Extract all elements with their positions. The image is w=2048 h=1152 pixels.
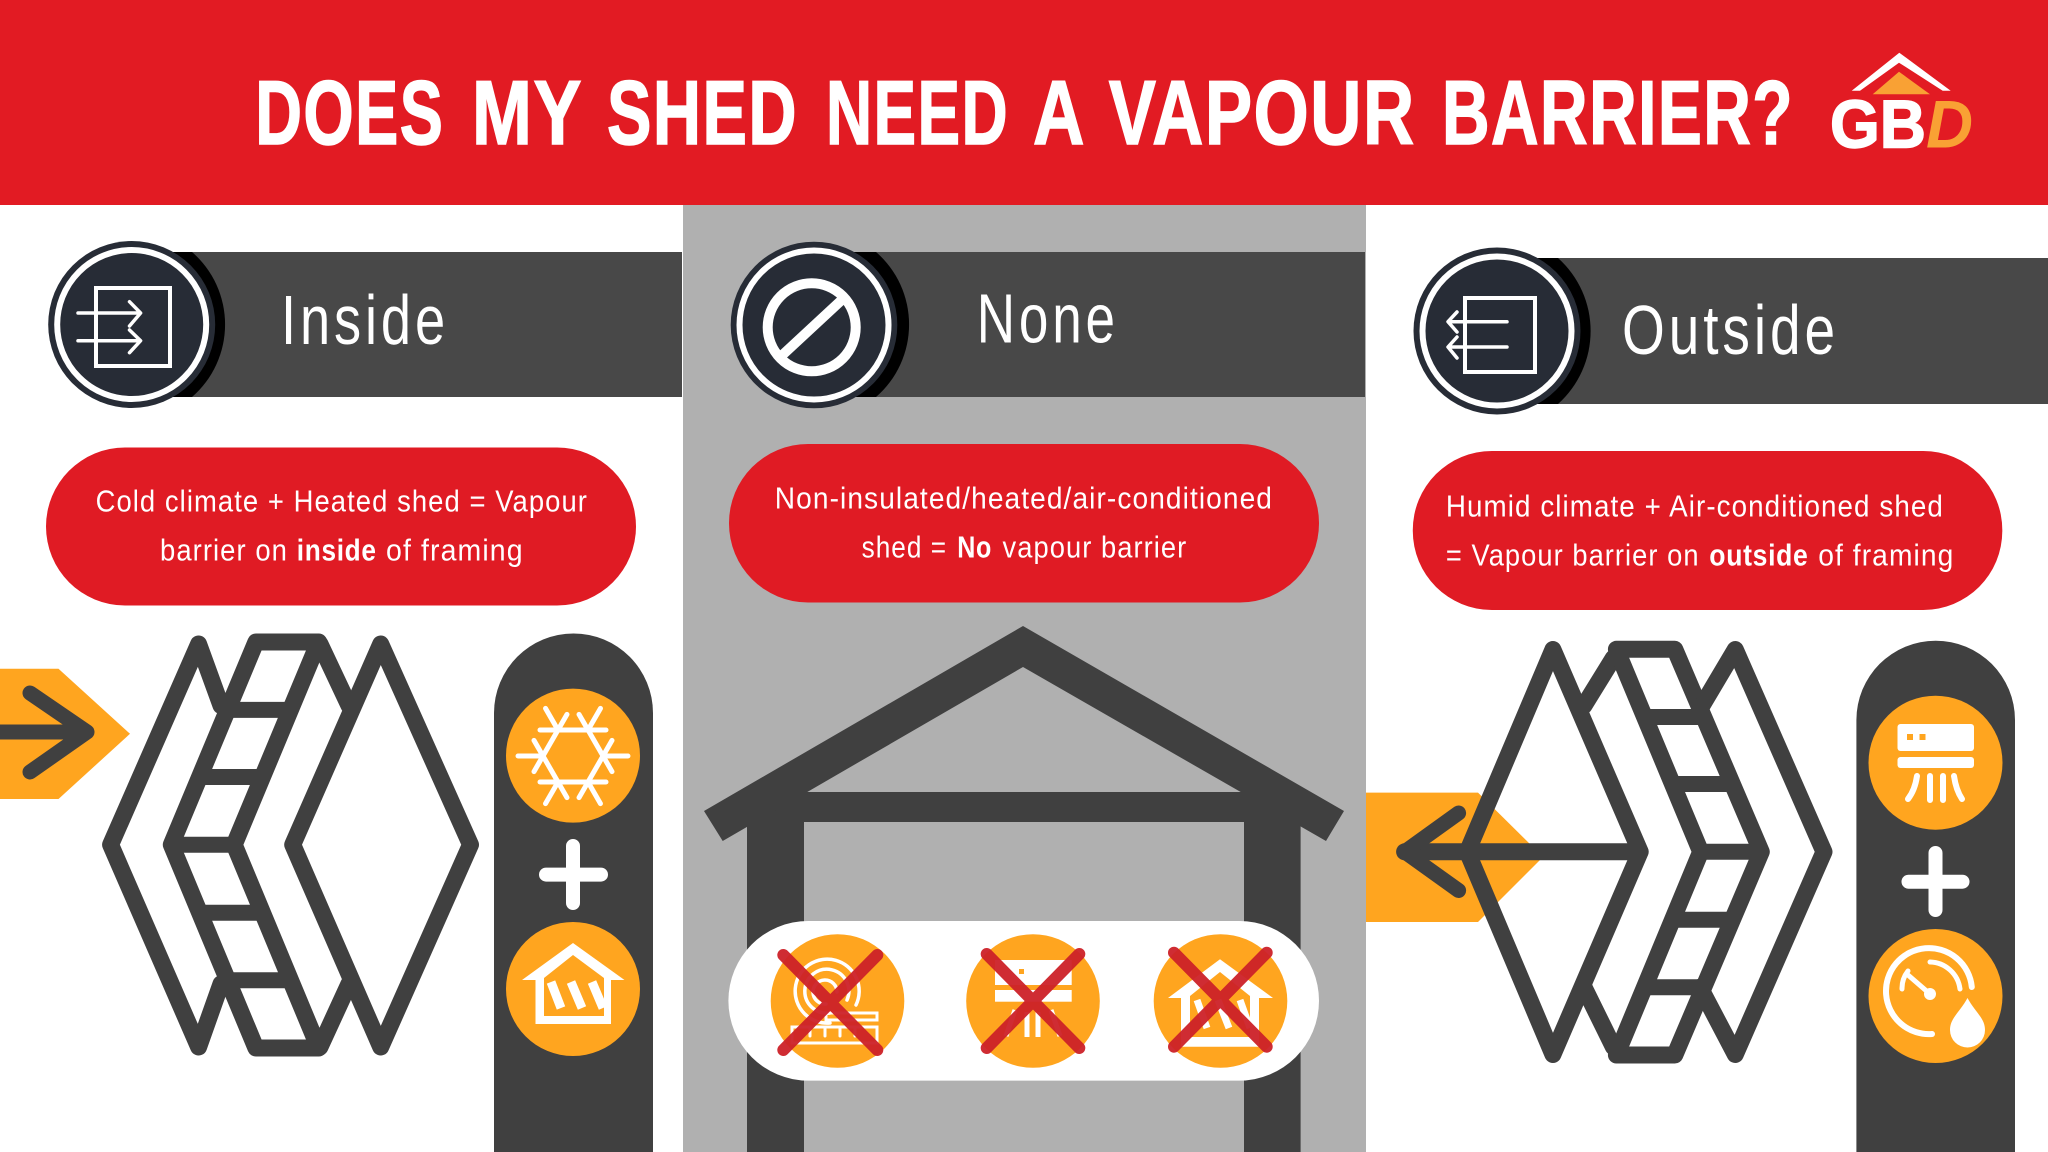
- icon: arrows into box: [48, 241, 215, 408]
- title: VAPOUR: [1109, 63, 1416, 164]
- callout: cold climate: Cold climate + Heated shed = Vapour: [96, 484, 588, 519]
- panel: none: [704, 242, 1365, 1152]
- callout: humid climate: = Vapour barrier on: [1446, 538, 1700, 573]
- icon: humidity gauge: [1868, 929, 2002, 1063]
- title: MY: [472, 63, 583, 164]
- icon: snowflake: [506, 689, 640, 823]
- header banner: [0, 0, 2048, 205]
- wall layers diagram with arrow: [1405, 649, 1824, 1055]
- strip: no insulation, heat or air conditioning: [728, 921, 1319, 1081]
- callout: non-insulated: shed =: [862, 529, 947, 564]
- icon: plus: [546, 846, 601, 903]
- heading bar: none: [815, 252, 1365, 397]
- logo: GBD: [1830, 53, 1973, 162]
- icon: crossed-out air conditioner: [966, 934, 1100, 1068]
- icon: plus: [1908, 853, 1962, 910]
- heading bar: inside: [130, 252, 682, 397]
- icon: crossed-out insulation: [771, 934, 904, 1068]
- title: A: [1033, 63, 1086, 164]
- logo: GBD: GB: [1830, 86, 1926, 162]
- heading bar: inside: Inside: [281, 281, 449, 359]
- callout: non-insulated: [729, 444, 1319, 602]
- title: SHED: [607, 63, 798, 164]
- icon: heated house: [506, 922, 640, 1056]
- icon: arrows out of box: [1414, 248, 1580, 414]
- heading bar: outside: [1500, 258, 2048, 404]
- heading bar: outside: Outside: [1622, 291, 1839, 369]
- callout: humid climate: outside: [1709, 538, 1808, 573]
- callout: cold climate: of framing: [386, 533, 524, 568]
- icon: air conditioner: [1868, 696, 2002, 830]
- heading bar: none: None: [977, 280, 1119, 358]
- callout: humid climate: of framing: [1818, 538, 1954, 573]
- title: BARRIER?: [1442, 63, 1794, 164]
- shed frame: [704, 626, 1344, 1152]
- panel: outside: [1366, 248, 2048, 1152]
- panel: middle grey column: [683, 205, 1366, 1152]
- wall layers diagram: [111, 642, 470, 1048]
- callout: cold climate: inside: [297, 533, 377, 568]
- panel: inside: [0, 241, 682, 1152]
- condition strip: cold + heated: [494, 634, 653, 1152]
- logo: GBD: D: [1926, 86, 1973, 162]
- callout: non-insulated: vapour barrier: [1002, 529, 1187, 564]
- title: DOES: [255, 63, 444, 164]
- callout: cold climate: barrier on: [160, 533, 288, 568]
- callout: humid climate: Humid climate + Air-conditioned shed: [1446, 489, 1944, 524]
- icon: prohibited sign: [731, 242, 897, 408]
- title: [255, 63, 1794, 164]
- title: NEED: [826, 63, 1009, 164]
- arrow: into wall: [0, 669, 130, 799]
- callout: non-insulated: No: [957, 529, 992, 564]
- condition strip: humid + air conditioned: [1856, 641, 2015, 1152]
- arrow: out of wall background: [1366, 793, 1543, 922]
- callout: humid climate: [1413, 451, 2002, 610]
- callout: cold climate: [46, 448, 636, 606]
- icon: crossed-out heated house: [1154, 934, 1287, 1068]
- callout: non-insulated: Non-insulated/heated/air-conditioned: [775, 480, 1273, 515]
